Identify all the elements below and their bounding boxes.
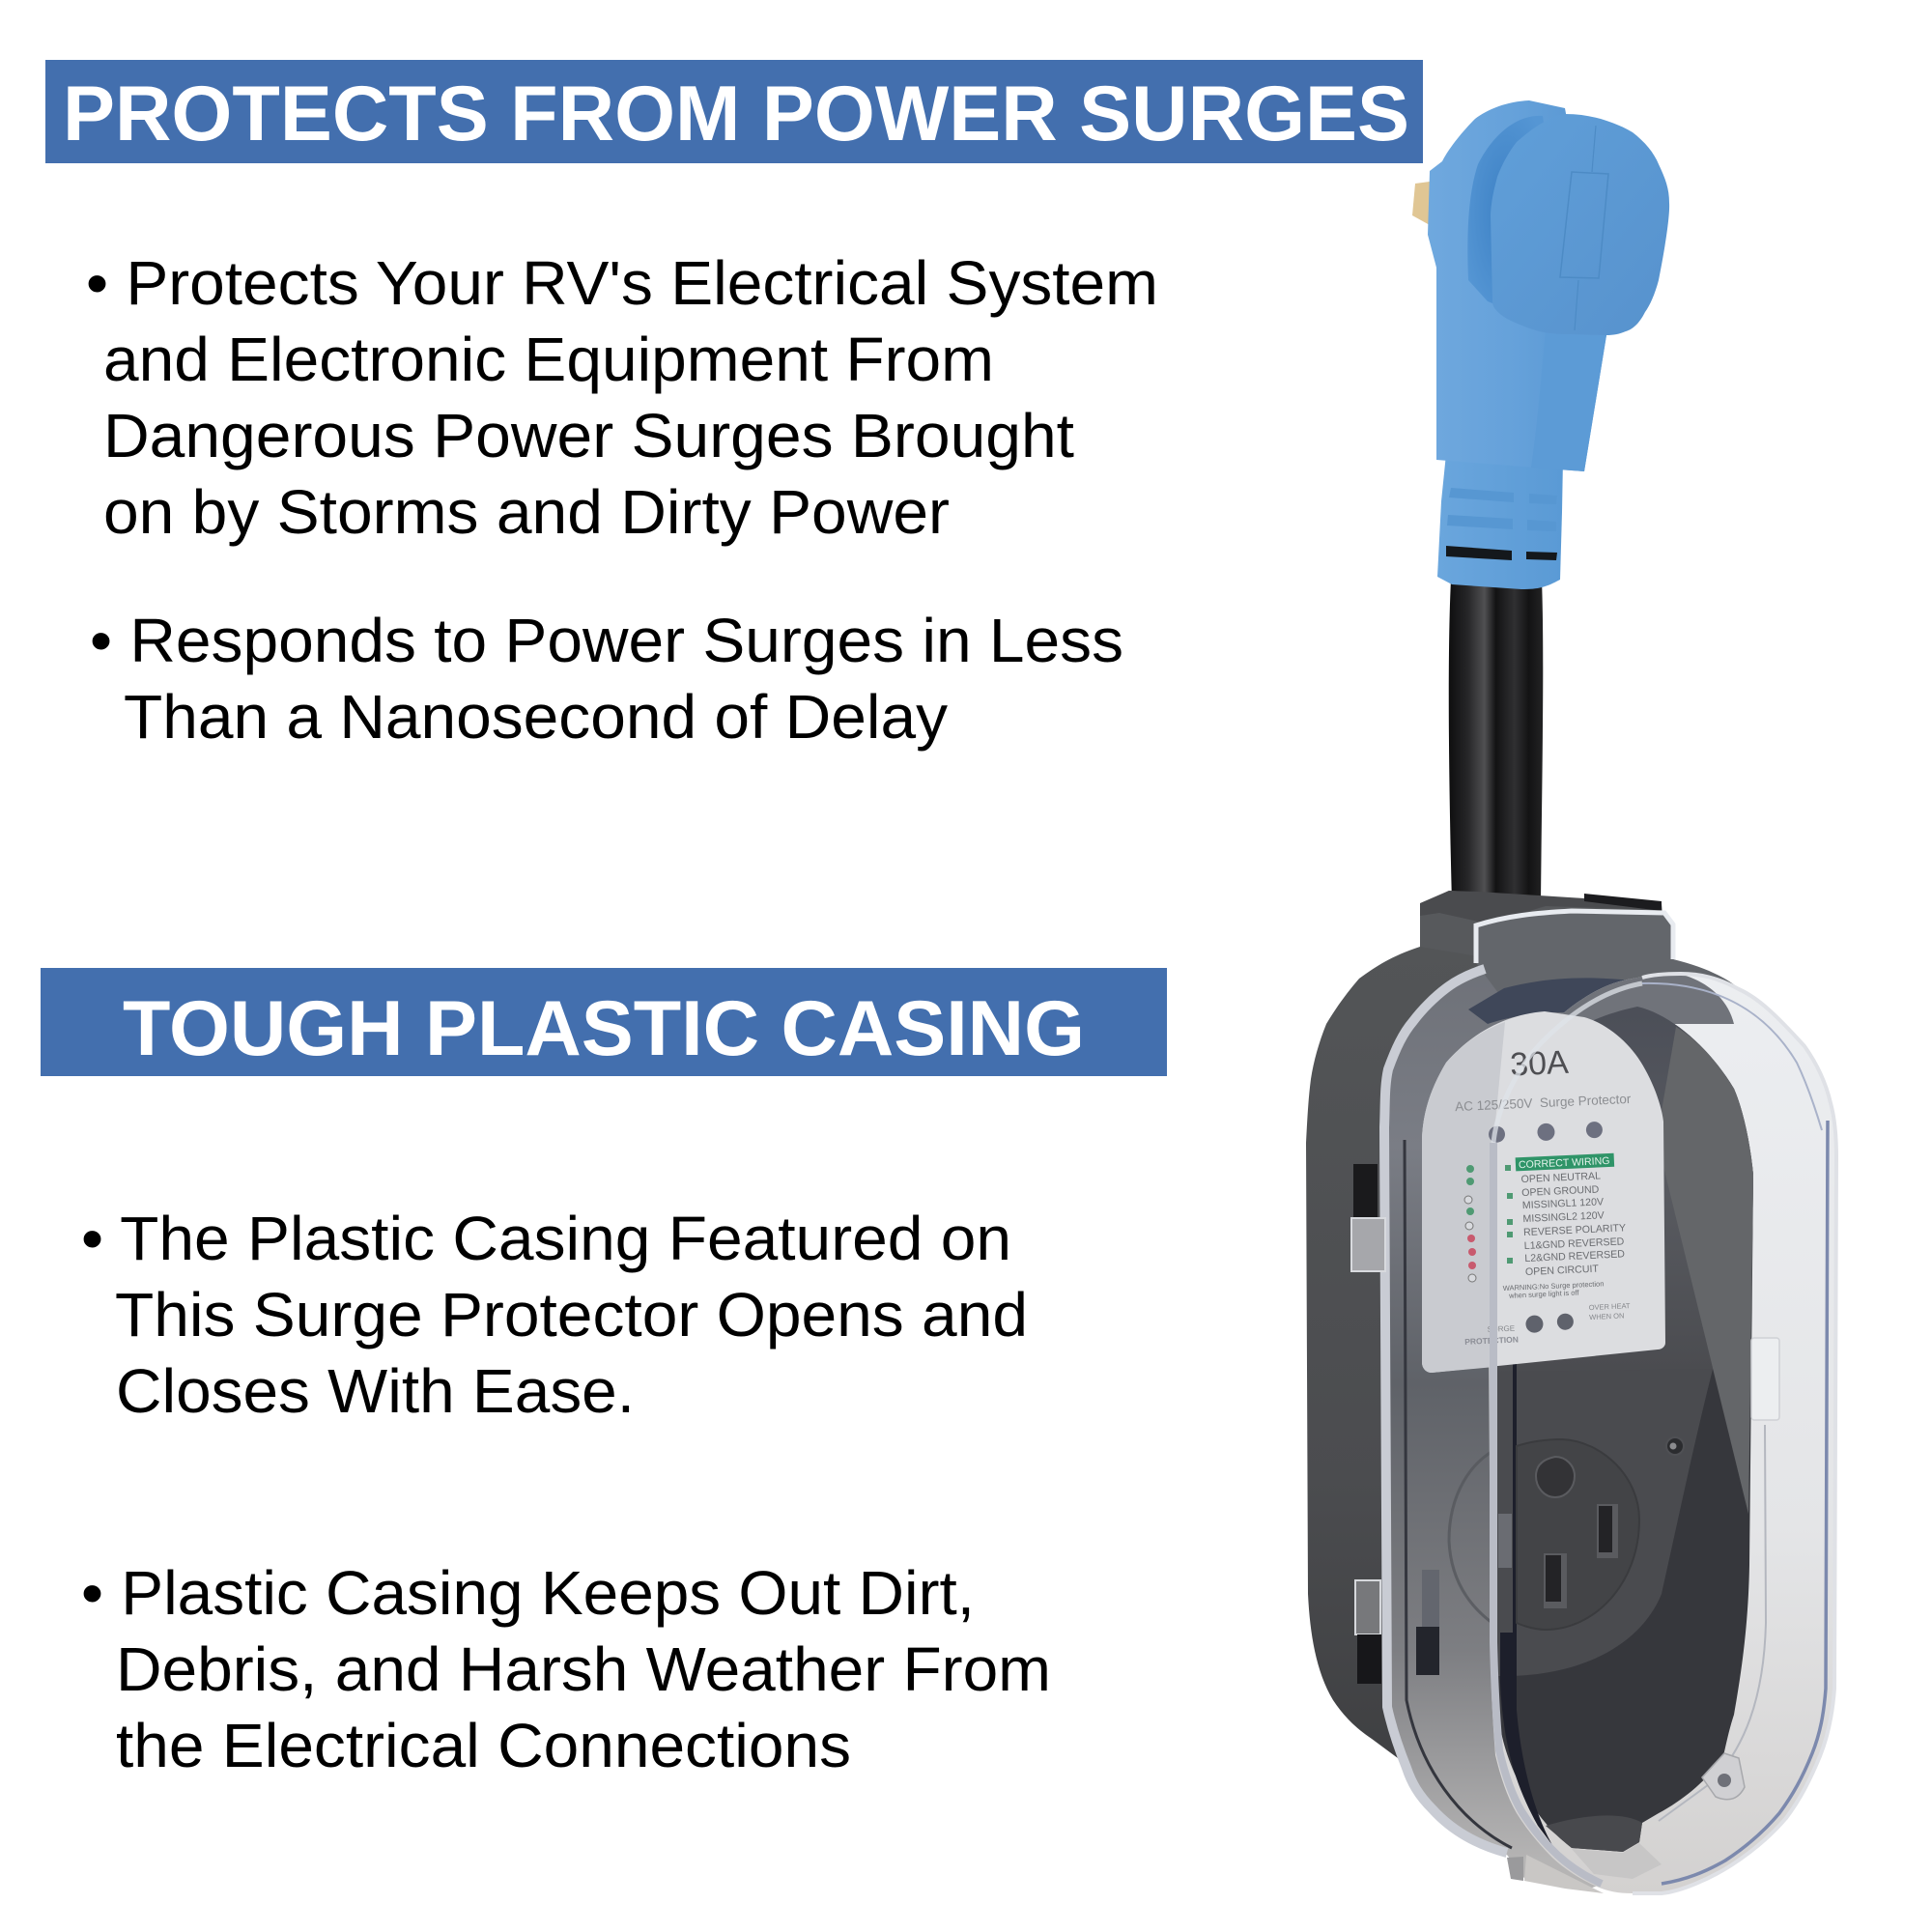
text block: electrical system protection (86, 248, 1158, 547)
label text and indicators: CORRECT WIRING (1519, 1155, 1610, 1171)
upper plate region (1493, 1007, 1753, 1546)
label text and indicators: PROTECTION (1464, 1334, 1519, 1347)
text block: electrical system protection: • Protects Your RV's Electrical System (86, 248, 1158, 318)
panel: tough plastic casing (41, 968, 1167, 1780)
label text and indicators: L2&GND REVERSED (1524, 1248, 1626, 1264)
text block: keeps out dirt and weather: the Electrical Connections (116, 1711, 851, 1780)
socket outline seen through cover (1449, 1444, 1507, 1633)
label text and indicators: OPEN GROUND (1521, 1183, 1600, 1199)
lower plate shade (1546, 1815, 1642, 1852)
navy reflection above label (1468, 978, 1633, 1024)
label text and indicators (1451, 1041, 1642, 1347)
text block: casing opens and closes (81, 1204, 1028, 1426)
label plate (1422, 1011, 1665, 1373)
left seam (1500, 1364, 1552, 1845)
front clear lid (1488, 974, 1836, 1893)
label text and indicators: L1&GND REVERSED (1524, 1236, 1625, 1252)
label text and indicators: when surge light is off (1508, 1288, 1580, 1300)
lid edges and reflections (1493, 974, 1836, 1893)
socket surround (1493, 1369, 1713, 1676)
heading banner: tough plastic casing (41, 968, 1167, 1076)
text block: response time: Than a Nanosecond of Delay (124, 682, 948, 752)
power cable (1449, 580, 1543, 903)
lighter plate wedge (1657, 1027, 1753, 1514)
side clip on lid (1751, 1338, 1779, 1420)
rear clear cover (1379, 911, 1763, 1893)
plug handle lower shade (1531, 328, 1606, 471)
text block: response time: • Responds to Power Surges in Less (90, 606, 1123, 675)
label text and indicators: WHEN ON (1589, 1311, 1625, 1321)
text block: keeps out dirt and weather: • Plastic Casing Keeps Out Dirt, (81, 1558, 975, 1628)
label text and indicators: AC 125/250V Surge Protector (1455, 1092, 1632, 1114)
grip groove (1467, 116, 1546, 309)
label text and indicators: WARNING:No Surge protection (1503, 1279, 1605, 1293)
label text and indicators: MISSINGL2 120V (1522, 1209, 1605, 1225)
label text and indicators: OVER HEAT (1589, 1301, 1631, 1312)
label text and indicators: REVERSE POLARITY (1523, 1222, 1626, 1238)
text block: electrical system protection: Dangerous Power Surges Brought (103, 401, 1074, 470)
text block: casing opens and closes: Closes With Ease. (116, 1356, 635, 1426)
heading banner: tough plastic casing: TOUGH PLASTIC CASING (123, 985, 1085, 1072)
label text and indicators: OPEN NEUTRAL (1520, 1170, 1601, 1185)
text block: keeps out dirt and weather (81, 1558, 1051, 1780)
label text and indicators: OPEN CIRCUIT (1525, 1264, 1600, 1278)
plug body (1428, 100, 1606, 471)
icon: three-prong socket (1498, 1437, 1684, 1630)
label text and indicators: SURGE (1487, 1324, 1515, 1334)
text block: casing opens and closes: This Surge Protector Opens and (115, 1280, 1028, 1350)
panel: protects from power surges (45, 60, 1423, 752)
text block: keeps out dirt and weather: Debris, and Harsh Weather From (116, 1634, 1051, 1704)
text block: electrical system protection: and Electronic Equipment From (103, 325, 994, 394)
glass below plate (1572, 1843, 1662, 1879)
brass prong (1412, 182, 1430, 225)
product photo: RV surge protector (1306, 100, 1836, 1893)
text block: electrical system protection: on by Storms and Dirty Power (103, 477, 950, 547)
text block: response time (90, 606, 1123, 752)
surge protector rear housing (1306, 891, 1673, 1835)
slate seen under top of lid (1500, 975, 1734, 1094)
lid latch tab (1702, 1753, 1745, 1800)
status LEDs (1464, 1165, 1513, 1282)
hinges (1351, 1164, 1439, 1684)
plug collar (1437, 454, 1563, 589)
plug grip (1491, 114, 1669, 335)
interior backplate seen through lid (1493, 975, 1753, 1879)
text block: casing opens and closes: • The Plastic Casing Featured on (81, 1204, 1011, 1273)
label text and indicators: MISSINGL1 120V (1522, 1196, 1605, 1211)
icon: blue plug (1412, 100, 1669, 589)
heading banner: protects from power surges: PROTECTS FROM POWER SURGES (63, 71, 1409, 157)
label text and indicators: 30A (1509, 1044, 1570, 1083)
